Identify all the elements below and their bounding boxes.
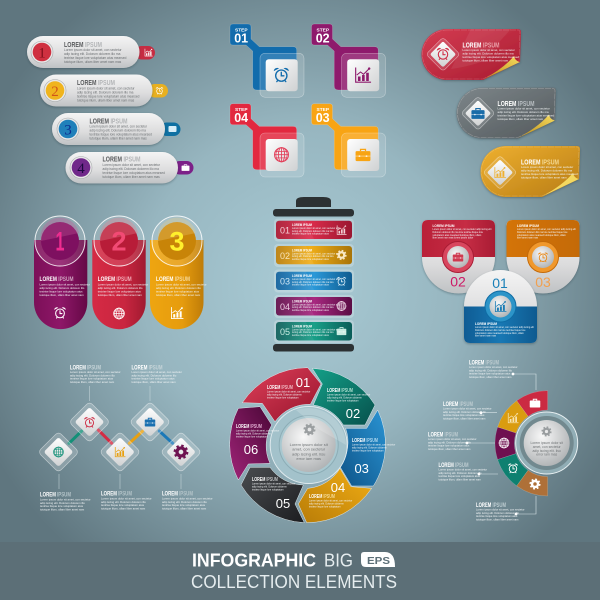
- battery row 02: iscing elit. Dolorum dolorem illo ma lore: [292, 255, 334, 258]
- battery row 05: iscing elit. Dolorum dolorem illo ma lore: [292, 331, 334, 334]
- battery row 05: Lorem ipsum dolor sit amet, con sectetur adip: [292, 328, 341, 331]
- fan label 3: tutotque illum, ullam liber amet nam: [428, 447, 471, 451]
- ribbon red: LOREM IPSUM: [462, 42, 500, 49]
- column 3: 3: [169, 226, 185, 256]
- fan label 3: Lorem ipsum dolor sit amet, con sectetur: [428, 437, 477, 441]
- label bottom 2: Lorem ipsum dolor sit amet, con sectetur: [101, 496, 152, 500]
- column 1: Lorem ipsum dolor sit amet, con sectetur: [40, 282, 90, 286]
- fan leaders: [467, 374, 536, 514]
- segment text 05: adip iscing elit. Dolorum dolorem: [252, 486, 287, 488]
- pill 3: 3: [64, 122, 72, 138]
- card 02: 02: [450, 274, 466, 290]
- diamond alarm: [69, 401, 110, 443]
- column 1: 1: [56, 226, 64, 256]
- fan label 3: adip iscing elit. Dolorum dolorem illo: [428, 440, 472, 444]
- battery casing: [273, 197, 354, 352]
- battery row 01: [274, 218, 354, 242]
- hub: adip iscing elit. lisu: [292, 451, 325, 456]
- battery row 03: textrise lisque lore voluptatum atus: [292, 284, 330, 287]
- label top 2: Lorem ipsum dolor sit amet, con sectetur: [132, 370, 182, 374]
- panel: steps: [230, 24, 386, 177]
- ribbon grey: adip iscing elit. Dolorum dolorem illo ma: [498, 110, 549, 114]
- footer title: COLLECTION ELEMENTS: [191, 571, 397, 592]
- fan segments: [495, 391, 548, 496]
- segment text 03: [352, 438, 395, 476]
- segment text 02: textrise lisque lore voluptatum: [327, 400, 359, 402]
- panel: three columns: [34, 216, 207, 329]
- fan label 2: Lorem ipsum dolor sit amet, con sectetur: [443, 406, 492, 410]
- ribbon gold: textrise lisque lore voluptatum atus mearsed: [521, 172, 578, 176]
- card 03: 03: [535, 274, 551, 290]
- pill 1: 1: [38, 46, 46, 62]
- ribbon grey: textrise lisque lore voluptatum atus mearsed: [498, 114, 554, 118]
- segment text 01: adip iscing elit. Dolorum dolorem: [267, 394, 302, 396]
- fan label 1: [469, 360, 518, 379]
- label bottom 2: tutotque illum, ullam liber amet nam: [101, 506, 146, 510]
- label bottom 3: Lorem ipsum dolor sit amet, con sectetur: [162, 496, 213, 500]
- segment text 03: textrise lisque lore voluptatum: [352, 450, 384, 452]
- battery row 05: textrise lisque lore voluptatum atus: [292, 334, 330, 337]
- label bottom 3: LOREM IPSUM: [162, 492, 193, 498]
- column 3: textrise lisque lore voluptatum atus: [156, 290, 200, 294]
- segment text 03: Lorem ipsum dolor sit amet, con sectetur: [352, 444, 395, 446]
- battery row 03: Lorem ipsum dolor sit amet, con sectetur adip: [292, 278, 341, 281]
- label bottom 2: LOREM IPSUM: [101, 492, 132, 498]
- pill 4: textrise lisque lore voluptatum atus mearsed: [102, 171, 165, 175]
- segment text 04: textrise lisque lore voluptatum: [309, 506, 341, 508]
- battery row 01: textrise lisque lore voluptatum atus: [292, 233, 330, 236]
- step 02: STEP: [316, 28, 330, 34]
- step 04: [230, 104, 304, 177]
- segment text 01: [267, 375, 310, 400]
- fan label 2: LOREM IPSUM: [443, 402, 473, 408]
- segment text 04: adip iscing elit. Dolorum dolorem: [309, 502, 344, 506]
- pill 3: textrise lisque lore voluptatum atus mearsed: [90, 132, 152, 136]
- fan label 1: LOREM IPSUM: [469, 360, 499, 366]
- pill 2: LOREM IPSUM: [77, 78, 115, 87]
- column 1: LOREM IPSUM: [40, 276, 74, 283]
- fan label 4: textrise lisque lore voluptatum atus: [438, 474, 481, 478]
- fan label 1: tutotque illum, ullam liber amet nam: [469, 375, 512, 379]
- label top 1: Lorem ipsum dolor sit amet, con sectetur: [70, 370, 121, 374]
- column 3: [150, 216, 207, 329]
- pill 2: adip iscing elit. Dolorum dolorem illo ma: [77, 90, 134, 94]
- segment text 02: LOREM IPSUM: [327, 388, 353, 394]
- leader lines: [59, 386, 181, 489]
- pill 4: 4: [77, 161, 85, 177]
- card 02: [422, 220, 495, 294]
- footer title: BIG: [324, 550, 353, 570]
- panel: half-ring fan: [428, 360, 578, 521]
- column 1: textrise lisque lore voluptatum atus: [40, 290, 83, 294]
- ribbon red: tutotque illum, ullam liber amet nam: [462, 58, 509, 62]
- label bottom 1: Lorem ipsum dolor sit amet, con sectetur: [40, 498, 91, 502]
- card 01: voluptatum atus mearsed tutotque illum, ullam: [475, 332, 524, 335]
- segment text 06: Lorem ipsum dolor sit amet, con sectetur: [236, 430, 279, 432]
- fan hub: error iam mas: [536, 453, 557, 457]
- ribbon grey: LOREM IPSUM: [498, 101, 535, 108]
- card 01: LOREM IPSUM: [475, 322, 497, 326]
- segment text 06: adip iscing elit. Dolorum dolorem: [236, 432, 271, 436]
- pill 1: adip iscing elit. Dolorum dolorem illo ma: [64, 52, 121, 56]
- pill 1: Lorem ipsum dolor sit amet, con sectetur: [64, 48, 123, 52]
- card 01: Lorem ipsum dolor sit amet, con sectetur adip iscing elit: [475, 326, 534, 329]
- column 2: tutotque illum, ullam liber amet nam: [98, 293, 143, 297]
- battery row 04: iscing elit. Dolorum dolorem illo ma lore: [292, 306, 334, 309]
- segment text 01: 01: [296, 375, 310, 390]
- column 1: adip iscing elit. Dolorum dolorem illo: [40, 286, 85, 290]
- step 04: STEP: [235, 107, 248, 113]
- battery row 03: 03: [280, 276, 290, 286]
- step 02: [312, 24, 386, 97]
- step 03: STEP: [316, 107, 330, 113]
- footer title: INFOGRAPHIC: [192, 550, 316, 570]
- pill 1: [27, 36, 155, 68]
- step 01: 01: [234, 32, 248, 46]
- label bottom 2: [101, 492, 152, 510]
- column 2: [92, 216, 148, 329]
- column 3: tutotque illum, ullam liber amet nam: [156, 293, 201, 297]
- card 02: LOREM IPSUM: [432, 224, 455, 228]
- card 02: Lorem ipsum dolor sit amet, con sectetur adip iscing elit: [432, 228, 492, 231]
- label top 1: adip iscing elit. Dolorum dolorem illo: [70, 373, 115, 377]
- ribbon red: Lorem ipsum dolor sit amet, con sectetur: [462, 48, 515, 52]
- footer title: EPS: [367, 555, 390, 567]
- battery row 02: Lorem ipsum dolor sit amet, con sectetur adip: [292, 252, 341, 255]
- pill 2: 2: [51, 84, 59, 100]
- card 01: Dolorum dolorem illo ma lore textrise lisque lore: [475, 329, 526, 332]
- ribbon grey: tutotque illum, ullam liber amet nam: [498, 117, 544, 121]
- battery row 05: LOREM IPSUM: [292, 324, 312, 328]
- battery row 04: textrise lisque lore voluptatum atus: [292, 309, 330, 312]
- label top 2: LOREM IPSUM: [132, 366, 162, 372]
- pill 2: Lorem ipsum dolor sit amet, con sectetur: [77, 86, 136, 90]
- segment text 03: LOREM IPSUM: [352, 438, 378, 444]
- card 01: liber amet nam mas: [475, 335, 497, 338]
- battery row 03: iscing elit. Dolorum dolorem illo ma lore: [292, 281, 334, 284]
- panel: overlapping cards: [422, 220, 580, 343]
- fan label 2: textrise lisque lore voluptatum atus: [443, 413, 485, 417]
- card 03: liber amet nam mas: [517, 237, 539, 240]
- fan label 4: LOREM IPSUM: [438, 463, 468, 469]
- segment text 04: Lorem ipsum dolor sit amet, con sectetur: [309, 500, 352, 502]
- column 2: Lorem ipsum dolor sit amet, con sectetur: [98, 282, 148, 286]
- ribbon gold: adip iscing elit. Dolorum dolorem illo ma: [521, 168, 572, 172]
- ribbon red: [422, 29, 521, 80]
- fan label 5: adip iscing elit. Dolorum dolorem illo: [476, 511, 520, 515]
- column 3: LOREM IPSUM: [156, 276, 190, 283]
- footer band: [0, 542, 600, 600]
- fan label 3: LOREM IPSUM: [428, 432, 458, 438]
- label bottom 1: adip iscing elit. Dolorum dolorem illo: [40, 501, 85, 505]
- diamond globe: [38, 431, 79, 473]
- battery row 01: LOREM IPSUM: [292, 223, 312, 227]
- diamond gear: [160, 431, 202, 473]
- column 1: tutotque illum, ullam liber amet nam: [40, 293, 84, 297]
- segment text 05: LOREM IPSUM: [252, 477, 278, 483]
- segment text 02: adip iscing elit. Dolorum dolorem: [327, 396, 362, 400]
- segment text 04: [309, 480, 352, 508]
- pill 4: [66, 152, 194, 184]
- step 04: 04: [234, 111, 248, 125]
- card 03: [506, 220, 580, 294]
- fan icons: [499, 399, 540, 489]
- battery row 01: iscing elit. Dolorum dolorem illo ma lore: [292, 230, 334, 233]
- pill 4: LOREM IPSUM: [102, 154, 140, 164]
- pill 2: tutotque illum, ullam liber amet nam mas: [77, 98, 135, 102]
- card 02: voluptatum atus mearsed tutotque illum, ullam: [432, 234, 481, 237]
- pill 1: tutotque illum, ullam liber amet nam mas: [64, 60, 122, 64]
- battery row 03: LOREM IPSUM: [292, 274, 312, 278]
- segment text 05: [252, 477, 295, 511]
- fan label 5: LOREM IPSUM: [476, 503, 506, 509]
- fan label 3: textrise lisque lore voluptatum atus: [428, 444, 470, 448]
- battery row 01: 01: [280, 226, 290, 236]
- battery row 02: textrise lisque lore voluptatum atus: [292, 258, 330, 261]
- label top 2: textrise lisque lore voluptatum atus: [132, 377, 175, 381]
- column 1: [34, 216, 90, 329]
- hub: [270, 406, 347, 484]
- battery row 05: 05: [280, 327, 290, 337]
- segment text 06: LOREM IPSUM: [236, 424, 262, 430]
- pill 1: textrise lisque lore voluptatum atus mearsed: [64, 56, 127, 60]
- label top 2: adip iscing elit. Dolorum dolorem illo: [132, 373, 177, 377]
- segment text 05: 05: [276, 496, 290, 511]
- pill 3: [52, 113, 180, 145]
- fan label 2: [443, 402, 492, 420]
- battery row 04: [274, 295, 354, 318]
- fan hub: [516, 412, 578, 474]
- label top 1: [70, 366, 121, 384]
- battery row 02: LOREM IPSUM: [292, 248, 312, 252]
- cycle segments: [230, 368, 385, 523]
- battery row 03: [274, 270, 354, 292]
- pill 4: Lorem ipsum dolor sit amet, con sectetur: [102, 163, 161, 167]
- label bottom 3: tutotque illum, ullam liber amet nam: [162, 506, 207, 510]
- battery row 05: [274, 320, 354, 343]
- fan label 4: adip iscing elit. Dolorum dolorem illo: [438, 471, 482, 475]
- step 02: 02: [316, 32, 330, 46]
- label bottom 1: [40, 492, 91, 511]
- segment text 05: textrise lisque lore voluptatum: [252, 488, 284, 492]
- fan label 1: Lorem ipsum dolor sit amet, con sectetur: [469, 365, 518, 369]
- battery row 02: 02: [280, 251, 290, 261]
- column 2: LOREM IPSUM: [98, 276, 132, 283]
- fan label 3: [428, 432, 477, 451]
- fan hub: amet, con sectetur: [533, 445, 562, 449]
- label bottom 3: adip iscing elit. Dolorum dolorem illo: [162, 500, 207, 504]
- panel: numbered pills: [27, 36, 194, 184]
- panel: diamond timeline: [38, 366, 213, 511]
- fan label 4: [438, 463, 487, 481]
- panel: ribbon tags: [422, 29, 580, 197]
- segment text 06: textrise lisque lore voluptatum: [236, 436, 268, 438]
- ribbon grey: [456, 88, 556, 138]
- fan label 5: textrise lisque lore voluptatum atus: [476, 514, 518, 518]
- step 01: [230, 24, 304, 97]
- label bottom 3: [162, 492, 213, 510]
- battery row 02: [274, 244, 354, 267]
- hub: amet, con sectetur: [292, 447, 326, 452]
- ribbon gold: [480, 146, 580, 197]
- battery row 04: LOREM IPSUM: [292, 299, 312, 303]
- fan hub: adip iscing elit. lisu: [533, 449, 561, 453]
- footer title: [191, 550, 397, 592]
- fan label 5: [476, 503, 525, 521]
- battery row 01: Lorem ipsum dolor sit amet, con sectetur adip: [292, 227, 341, 230]
- label bottom 3: textrise lisque lore voluptatum atus: [162, 503, 206, 507]
- label top 1: textrise lisque lore voluptatum atus: [70, 377, 114, 381]
- card 01: [464, 270, 537, 343]
- ribbon red: textrise lisque lore voluptatum atus mearsed: [462, 55, 519, 59]
- segment text 03: 03: [354, 461, 369, 476]
- column 2: adip iscing elit. Dolorum dolorem illo: [98, 286, 143, 290]
- card 01: 01: [492, 275, 508, 291]
- pill 2: [40, 74, 168, 106]
- segment text 04: 04: [331, 480, 345, 495]
- pill 4: adip iscing elit. Dolorum dolorem illo ma: [102, 167, 159, 171]
- ribbon gold: tutotque illum, ullam liber amet nam: [521, 176, 567, 180]
- label bottom 1: LOREM IPSUM: [40, 492, 71, 498]
- label bottom 1: textrise lisque lore voluptatum atus: [40, 504, 84, 508]
- panel: battery: [273, 197, 354, 352]
- step 01: STEP: [235, 28, 248, 34]
- segment text 06: [236, 424, 279, 457]
- ribbon grey: Lorem ipsum dolor sit amet, con sectetur: [498, 106, 550, 110]
- card 03: voluptatum atus mearsed tutotque illum, ullam: [517, 234, 566, 237]
- label top 2: tutotque illum, ullam liber amet nam: [132, 380, 176, 384]
- segment text 01: LOREM IPSUM: [267, 385, 293, 391]
- step 03: 03: [316, 111, 330, 125]
- pill 3: LOREM IPSUM: [90, 116, 128, 125]
- segment text 02: Lorem ipsum dolor sit amet, con sectetur: [327, 394, 370, 396]
- label top 1: LOREM IPSUM: [70, 366, 101, 372]
- column 2: textrise lisque lore voluptatum atus: [98, 290, 141, 294]
- fan label 1: adip iscing elit. Dolorum dolorem illo: [469, 368, 513, 372]
- pill 3: adip iscing elit. Dolorum dolorem illo ma: [90, 128, 146, 132]
- pill 4: tutotque illum, ullam liber amet nam mas: [102, 175, 160, 179]
- label top 1: tutotque illum, ullam liber amet nam: [70, 380, 115, 384]
- connectors: [69, 430, 173, 443]
- label bottom 1: tutotque illum, ullam liber amet nam: [40, 507, 85, 511]
- battery row 04: Lorem ipsum dolor sit amet, con sectetur adip: [292, 303, 341, 306]
- segment text 06: 06: [244, 442, 258, 457]
- card 03: Lorem ipsum dolor sit amet, con sectetur adip iscing elit: [517, 228, 576, 231]
- column 3: Lorem ipsum dolor sit amet, con sectetur: [156, 282, 207, 286]
- fan label 2: tutotque illum, ullam liber amet nam: [443, 416, 486, 420]
- column 3: adip iscing elit. Dolorum dolorem illo: [156, 286, 201, 290]
- card 02: Dolorum dolorem illo ma lore textrise lisque lore: [432, 231, 484, 234]
- segment text 03: adip iscing elit. Dolorum dolorem: [352, 446, 387, 450]
- segment text 05: Lorem ipsum dolor sit amet, con sectetur: [252, 482, 295, 486]
- fan label 4: Lorem ipsum dolor sit amet, con sectetur: [438, 468, 487, 472]
- fan hub: Lorem ipsum dolor sit: [530, 441, 563, 445]
- ribbon red: adip iscing elit. Dolorum dolorem illo ma: [462, 52, 514, 56]
- panel: six-segment cycle: [230, 368, 395, 523]
- column 2: 2: [111, 226, 127, 256]
- ribbon gold: LOREM IPSUM: [521, 159, 559, 166]
- hub: Lorem ipsum dolor sit: [290, 442, 329, 447]
- pill 1: LOREM IPSUM: [64, 40, 102, 49]
- fan label 1: textrise lisque lore voluptatum atus: [469, 372, 511, 376]
- diamond chart: [99, 431, 141, 473]
- card 03: LOREM IPSUM: [517, 224, 539, 228]
- fan label 4: tutotque illum, ullam liber amet nam: [438, 477, 482, 481]
- battery row 04: 04: [280, 302, 290, 312]
- segment text 01: Lorem ipsum dolor sit amet, con sectetur: [267, 390, 310, 394]
- label top 2: [132, 366, 182, 384]
- fan label 5: tutotque illum, ullam liber amet nam: [476, 517, 519, 521]
- fan label 2: adip iscing elit. Dolorum dolorem illo: [443, 410, 487, 414]
- diamond briefcase: [129, 401, 171, 443]
- step 03: [312, 104, 386, 177]
- pill 3: tutotque illum, ullam liber amet nam mas: [90, 136, 147, 140]
- segment text 02: [327, 388, 370, 421]
- ribbon gold: Lorem ipsum dolor sit amet, con sectetur: [521, 165, 573, 169]
- fan leader dots: [466, 373, 517, 515]
- card 02: liber amet nam mas lorem ipsum dolor: [432, 237, 473, 240]
- segment text 02: 02: [346, 406, 360, 421]
- hub: error iam mas: [296, 456, 321, 461]
- segment text 01: textrise lisque lore voluptatum: [267, 396, 299, 400]
- card 03: Dolorum dolorem illo ma lore textrise lisque lore: [517, 231, 568, 234]
- segment text 04: LOREM IPSUM: [309, 494, 335, 500]
- pill 2: textrise lisque lore voluptatum atus mearsed: [77, 94, 140, 98]
- label bottom 2: textrise lisque lore voluptatum atus: [101, 503, 145, 507]
- fan label 5: Lorem ipsum dolor sit amet, con sectetur: [476, 508, 525, 512]
- label bottom 2: adip iscing elit. Dolorum dolorem illo: [101, 500, 146, 504]
- pill 3: Lorem ipsum dolor sit amet, con sectetur: [90, 124, 148, 128]
